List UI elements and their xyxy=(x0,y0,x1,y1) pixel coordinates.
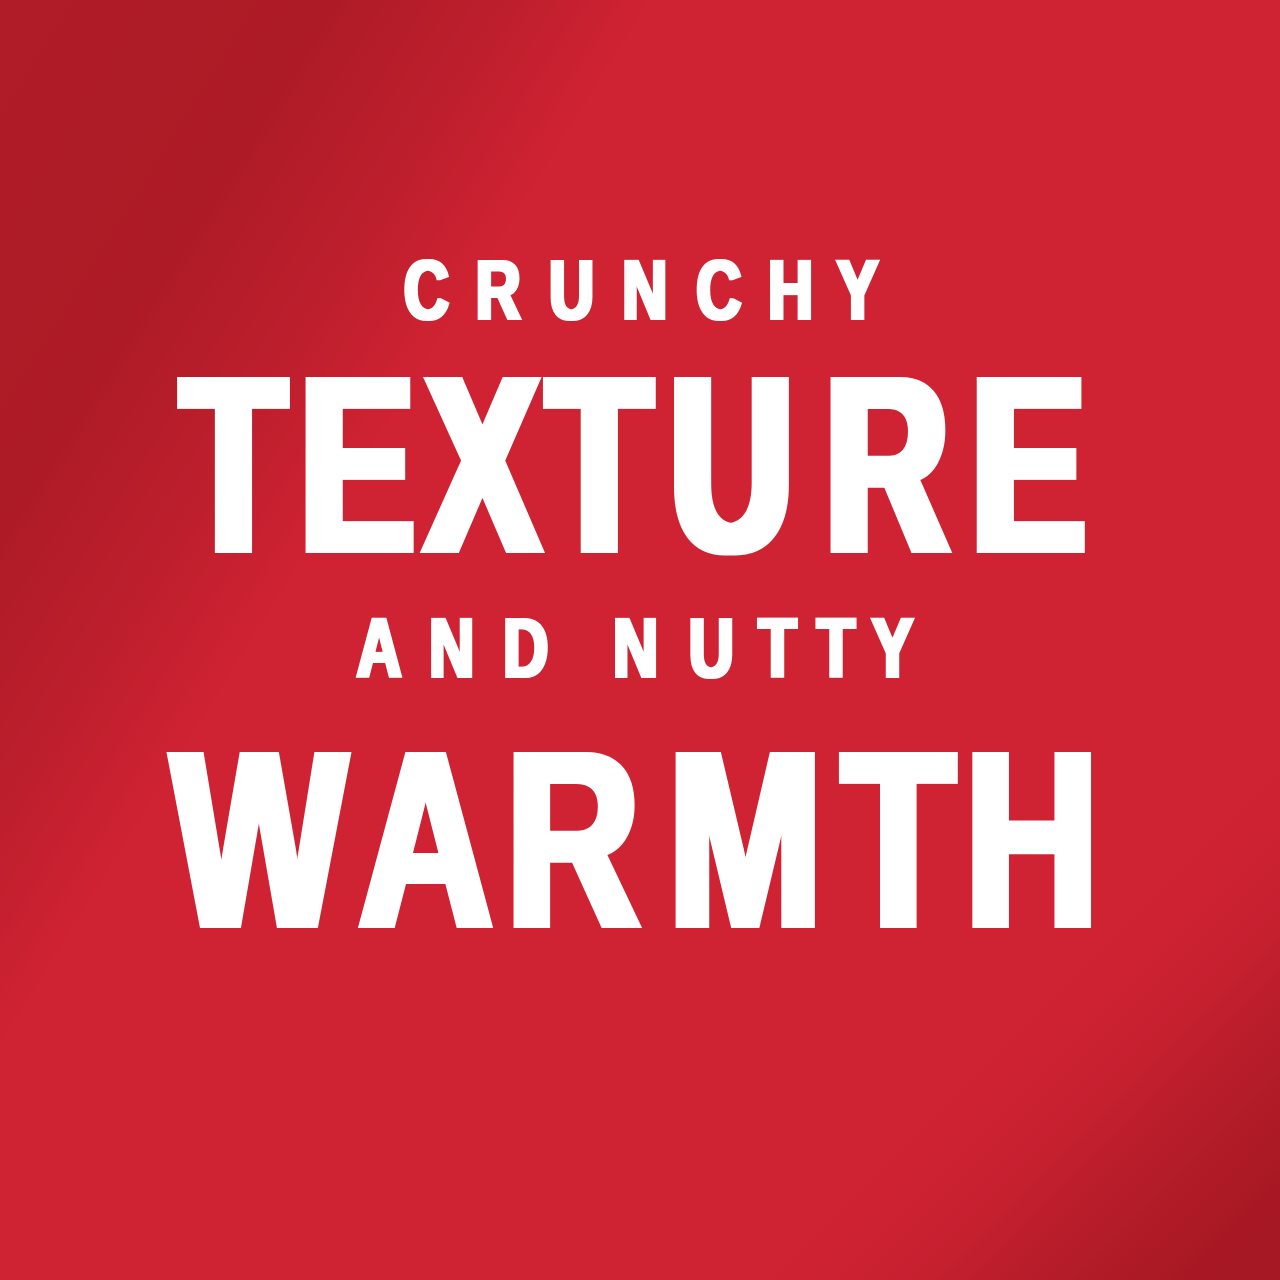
line: WARMTH: WARMTH xyxy=(172,700,1099,979)
line: AND NUTTY: AND NUTTY xyxy=(357,601,913,695)
headline text xyxy=(172,243,1099,979)
line: CRUNCHY: CRUNCHY xyxy=(404,243,878,337)
line: TEXTURE: TEXTURE xyxy=(182,325,1085,605)
